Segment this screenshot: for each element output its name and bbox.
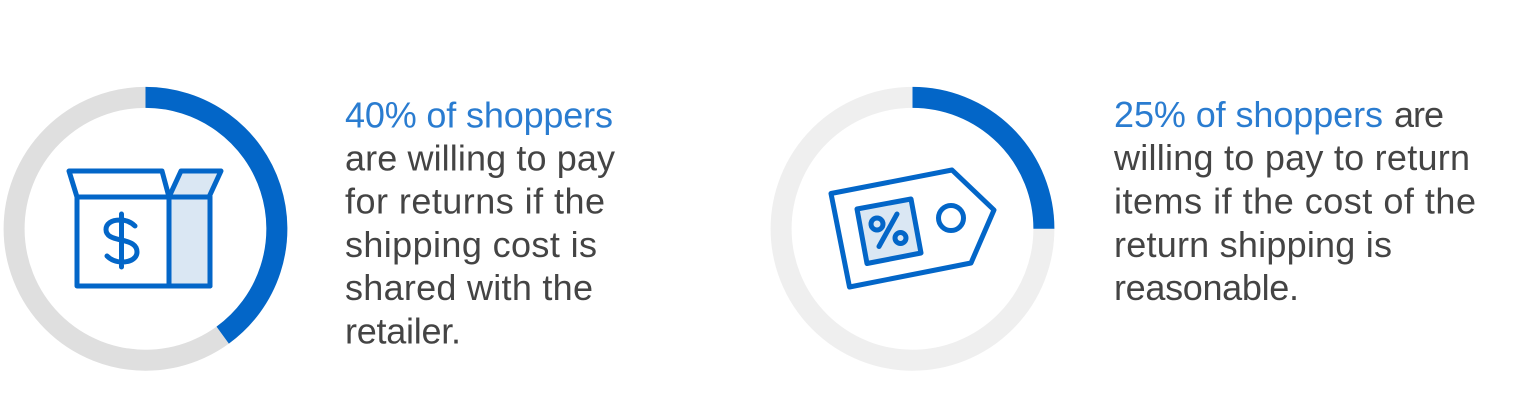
statement text: are willing to pay: [345, 138, 615, 178]
statement text: retailer.: [345, 310, 461, 352]
statement text: reasonable.: [1114, 267, 1299, 308]
donut chart: 25%: [781, 97, 1044, 360]
icon: price tag with percent: [831, 170, 994, 287]
donut chart: 40%: [14, 97, 277, 360]
statement text: return shipping is: [1114, 224, 1392, 265]
statement text: shipping cost is: [345, 224, 597, 265]
statement text: items if the cost of the: [1114, 180, 1476, 222]
panel: 25% of shoppers: [781, 94, 1476, 360]
statement text: [1113, 94, 1476, 308]
statement text: shared with the: [345, 267, 593, 308]
statement text: are: [1394, 94, 1444, 135]
panel: 40% of shoppers: [14, 94, 615, 360]
statement text: 40% of shoppers: [345, 94, 613, 136]
statement text: [345, 94, 615, 352]
statement text: 25% of shoppers: [1114, 94, 1383, 135]
statement text: willing to pay to return: [1113, 137, 1470, 178]
icon: open box with dollar sign: [69, 171, 221, 286]
statement text: for returns if the: [345, 180, 605, 222]
